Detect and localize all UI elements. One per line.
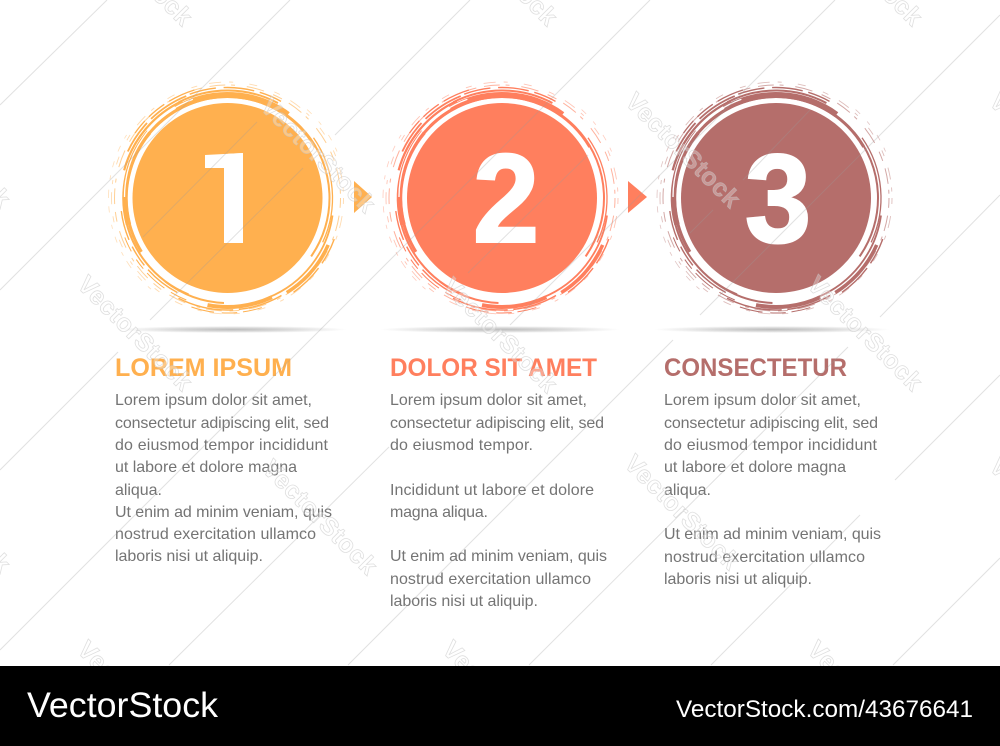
icon: rose brush circle with number 3: 3 (745, 129, 811, 270)
text block: step 2 body (390, 392, 607, 610)
text block: step 2 body: do eiusmod tempor. (390, 437, 533, 454)
watermark overlay: VectorStock (257, 454, 383, 580)
text block: step 2 body: Lorem ipsum dolor sit amet, (390, 392, 587, 409)
ground shadow 1 (117, 326, 347, 333)
arrow: step 1 to step 2 (354, 181, 372, 213)
arrow: step 2 to step 3 (628, 181, 647, 213)
footer url: VectorStock.com/43676641 (676, 696, 973, 723)
text block: step 3 body: Ut enim ad minim veniam, quis (664, 526, 881, 543)
icon: orange brush circle with number 1 (108, 82, 344, 314)
ground shadow 2 (380, 326, 620, 333)
text block: step 2 body: consectetur adipiscing elit, sed (390, 415, 604, 432)
text block: step 2 body: Ut enim ad minim veniam, quis (390, 548, 607, 565)
text block: step 1 body: ut labore et dolore magna (115, 459, 297, 476)
text block: step 1 body (115, 392, 332, 565)
icon: orange brush circle with number 1: 1 (195, 141, 271, 263)
text block: step 2 body: magna aliqua. (390, 504, 488, 521)
watermark overlay: VectorStock (255, 92, 381, 218)
footer logo text: VectorStock (27, 686, 219, 725)
panel: step 1 (108, 82, 372, 564)
text block: step 1 body: aliqua. (115, 482, 162, 499)
text block: step 2 body: laboris nisi ut aliquip. (390, 593, 538, 610)
text block: step 1 body: laboris nisi ut aliquip. (115, 548, 263, 565)
text block: step 1 body: nostrud exercitation ullamco (115, 526, 316, 543)
text block: step 1 body: Ut enim ad minim veniam, quis (115, 504, 332, 521)
footer band (0, 666, 1000, 746)
heading: consectetur: CONSECTETUR (664, 354, 847, 382)
text block: step 2 body: nostrud exercitation ullamco (390, 571, 591, 588)
text block: step 2 body: Incididunt ut labore et dolore (390, 482, 594, 499)
ground shadow 3 (654, 326, 890, 333)
text block: step 1 body: consectetur adipiscing elit, sed (115, 415, 329, 432)
panel: step 2 (334, 30, 670, 610)
icon: coral brush circle with number 2 (334, 30, 670, 366)
text block: step 3 body: laboris nisi ut aliquip. (664, 571, 812, 588)
heading: lorem ipsum: LOREM IPSUM (115, 354, 292, 382)
heading: dolor sit amet: DOLOR SIT AMET (390, 354, 597, 382)
watermark overlay: VectorStock (619, 449, 745, 575)
watermark overlay: VectorStock (620, 87, 746, 213)
watermark overlay: VectorStock (437, 272, 563, 398)
panel: step 3 (608, 30, 944, 588)
watermark overlay: VectorStock (72, 270, 198, 396)
text block: step 3 body: consectetur adipiscing elit, sed (664, 415, 878, 432)
text block: step 3 body (664, 392, 881, 588)
icon: coral brush circle with number 2: 2 (473, 129, 539, 270)
watermark overlay: VectorStock (802, 270, 928, 396)
text block: step 3 body: Lorem ipsum dolor sit amet, (664, 392, 861, 409)
text block: step 1 body: Lorem ipsum dolor sit amet, (115, 392, 312, 409)
icon: rose brush circle with number 3 (608, 30, 944, 366)
text block: step 1 body: do eiusmod tempor incididunt (115, 437, 329, 454)
text block: step 3 body: ut labore et dolore magna (664, 459, 846, 476)
text block: step 3 body: aliqua. (664, 482, 711, 499)
text block: step 3 body: nostrud exercitation ullamco (664, 549, 865, 566)
text block: step 3 body: do eiusmod tempor incididunt (664, 437, 878, 454)
